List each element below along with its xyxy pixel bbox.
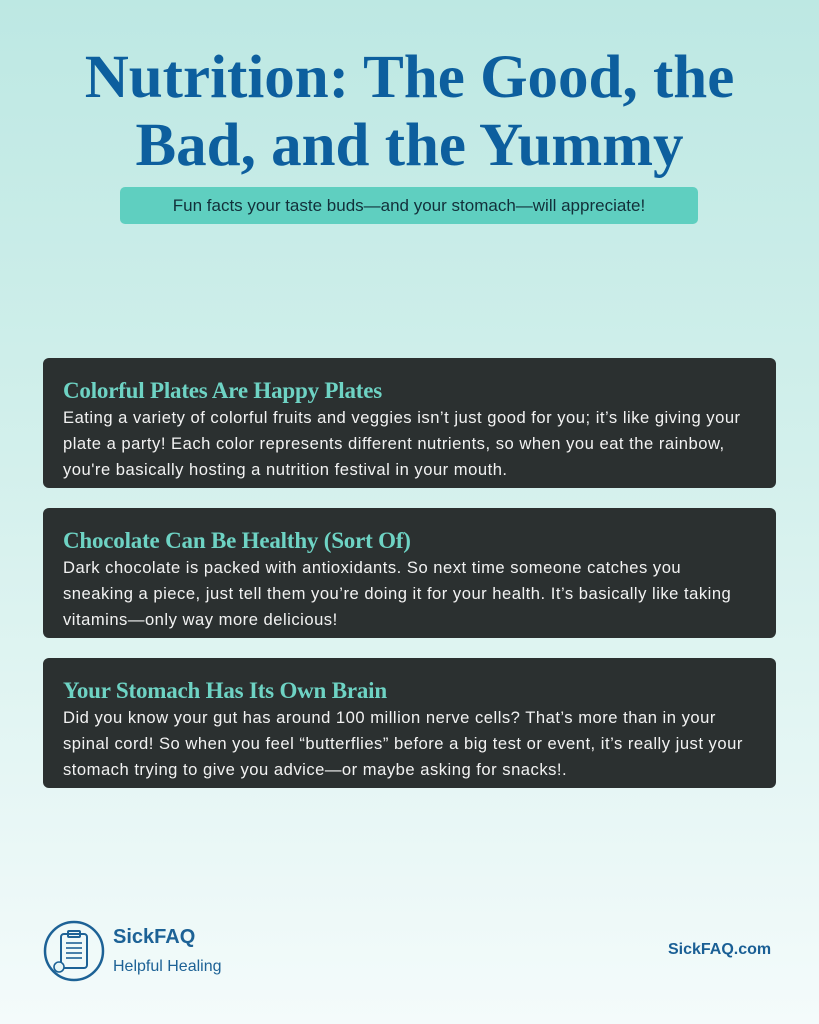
url: SickFAQ.com [668,941,771,958]
icon: clipboard [44,920,104,982]
subtitle pill: Fun facts your taste buds—and your stomach—will appreciate! [173,196,645,215]
heading: Chocolate Can Be Healthy (Sort Of) [63,528,411,553]
title: Nutrition: The Good, the [85,44,734,111]
text block: you're basically hosting a nutrition festival in your mouth. [63,460,508,479]
title: Bad, and the Yummy [135,112,684,179]
text block: Eating a variety of colorful fruits and veggies isn’t just good for you; it’s like giving your [63,408,741,427]
text block: sneaking a piece, just tell them you’re doing it for your health. It’s basically like taking [63,584,731,603]
text block: Dark chocolate is packed with antioxidants. So next time someone catches you [63,558,681,577]
brand name: SickFAQ [113,926,195,948]
text block [63,708,743,779]
panel: chocolate [43,508,776,638]
text block [63,408,741,479]
title [85,44,734,179]
text block: stomach trying to give you advice—or maybe asking for snacks!. [63,760,567,779]
text block [63,558,731,629]
heading: Colorful Plates Are Happy Plates [63,378,382,403]
panel: colorful plates [43,358,776,488]
text block: vitamins—only way more delicious! [63,610,338,629]
logo [44,920,222,982]
subtitle pill [120,187,698,224]
panel: stomach brain [43,658,776,788]
text block: spinal cord! So when you feel “butterflies” before a big test or event, it’s really just your [63,734,743,753]
text block: plate a party! Each color represents different nutrients, so when you eat the rainbow, [63,434,725,453]
text block: Did you know your gut has around 100 million nerve cells? That’s more than in your [63,708,716,727]
tagline: Helpful Healing [113,958,222,975]
heading: Your Stomach Has Its Own Brain [63,678,387,703]
